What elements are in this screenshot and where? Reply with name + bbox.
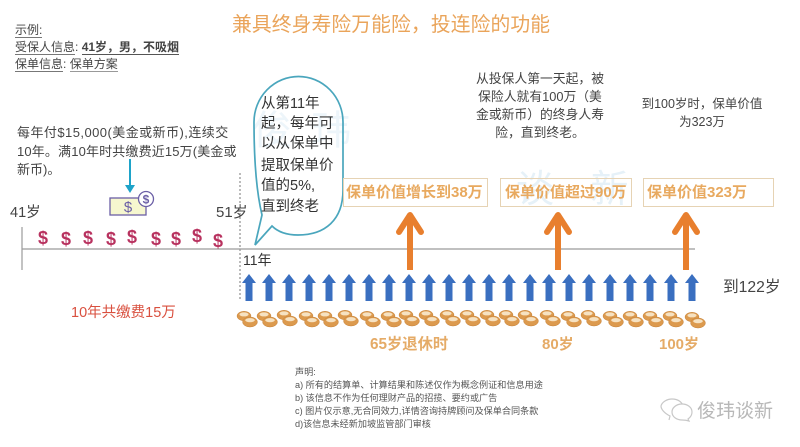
value box 323: 保单价值323万	[647, 184, 747, 201]
icon: banknote and coin: $	[143, 192, 150, 206]
speech bubble text: 从第11年	[261, 94, 320, 112]
dollar signs: $	[127, 227, 137, 247]
icon: banknote and coin	[110, 192, 154, 216]
example info block: 保单信息: 保单方案	[15, 57, 118, 71]
dollar signs: $	[151, 229, 161, 249]
wechat account name: 俊玮谈新	[697, 401, 773, 422]
value box 38: 保单价值增长到38万	[346, 184, 483, 201]
speech bubble text: 以从保单中	[261, 135, 334, 152]
11 years label: 11年	[243, 252, 272, 268]
to age 122 label: 到122岁	[723, 279, 781, 296]
icon: banknote and coin: $	[124, 199, 133, 216]
orange arrows	[399, 215, 697, 270]
disclaimer	[295, 367, 543, 429]
disclaimer: c) 图片仅示意,无合同效力,详情咨询持牌顾问及保单合同条款	[295, 406, 538, 416]
blue arrow from text to money	[125, 159, 135, 193]
payment description	[17, 125, 237, 177]
timeline axis	[22, 227, 695, 270]
speech bubble text: 提取保单价	[261, 157, 334, 174]
watermark behind timeline: 谈 新	[516, 169, 629, 211]
speech bubble	[254, 76, 343, 245]
age 51 label: 51岁	[216, 204, 248, 221]
speech bubble text: 直到终老	[261, 198, 319, 215]
value box 90: 保单价值超过90万	[505, 184, 627, 201]
age 100 note: 为323万	[679, 114, 725, 128]
age 41 label: 41岁	[10, 205, 41, 221]
title: 兼具终身寿险万能险，投连险的功能	[232, 14, 550, 36]
age 100 note	[642, 97, 762, 128]
life cover note	[476, 71, 604, 140]
example info block: 受保人信息: 41岁，男，不吸烟	[15, 40, 179, 54]
speech bubble text: 值的5%,	[261, 177, 315, 194]
dollar signs: $	[106, 229, 116, 249]
disclaimer: 声明:	[295, 367, 316, 377]
value box 38	[343, 178, 488, 207]
payment description: 每年付$15,000(美金或新币),连续交	[17, 125, 229, 140]
coin stacks	[237, 310, 705, 328]
age 100 note: 到100岁时，保单价值	[642, 97, 762, 111]
value box 323	[643, 178, 774, 207]
disclaimer: b) 该信息不作为任何理财产品的招揽、要约或广告	[295, 393, 497, 403]
dollar signs: $	[38, 228, 48, 248]
example info block	[15, 23, 179, 72]
life cover note: 险，直到终老。	[495, 125, 585, 140]
blue income arrows	[242, 274, 699, 301]
payment description: 10年。满10年时共缴费近15万(美金或	[17, 144, 237, 158]
dollar signs	[38, 226, 223, 251]
disclaimer: d)该信息未经新加坡监管部门审核	[295, 419, 431, 429]
life cover note: 保险人就有100万（美	[478, 89, 602, 104]
example info block: 示例:	[15, 23, 42, 37]
icon: wechat logo	[661, 399, 692, 421]
dollar signs: $	[83, 228, 93, 248]
disclaimer: a) 所有的结算单、计算结果和陈述仅作为概念例证和信息用途	[295, 380, 543, 390]
life cover note: 金或新币）的终身人寿	[476, 107, 604, 122]
10-year total payment label: 10年共缴费15万	[71, 305, 176, 321]
life cover note: 从投保人第一天起，被	[476, 71, 604, 86]
value box 90	[500, 178, 632, 207]
dollar signs: $	[61, 229, 71, 249]
dollar signs: $	[213, 231, 223, 251]
65 retirement label: 65岁退休时	[370, 336, 448, 353]
age 80 label: 80岁	[542, 336, 574, 353]
dollar signs: $	[192, 226, 202, 246]
payment description: 新币)。	[17, 162, 60, 177]
dollar signs: $	[171, 229, 181, 249]
speech bubble text: 起，每年可	[261, 115, 334, 132]
watermark behind bubble: 俊 玮	[252, 109, 351, 153]
age 100 label: 100岁	[659, 336, 699, 353]
